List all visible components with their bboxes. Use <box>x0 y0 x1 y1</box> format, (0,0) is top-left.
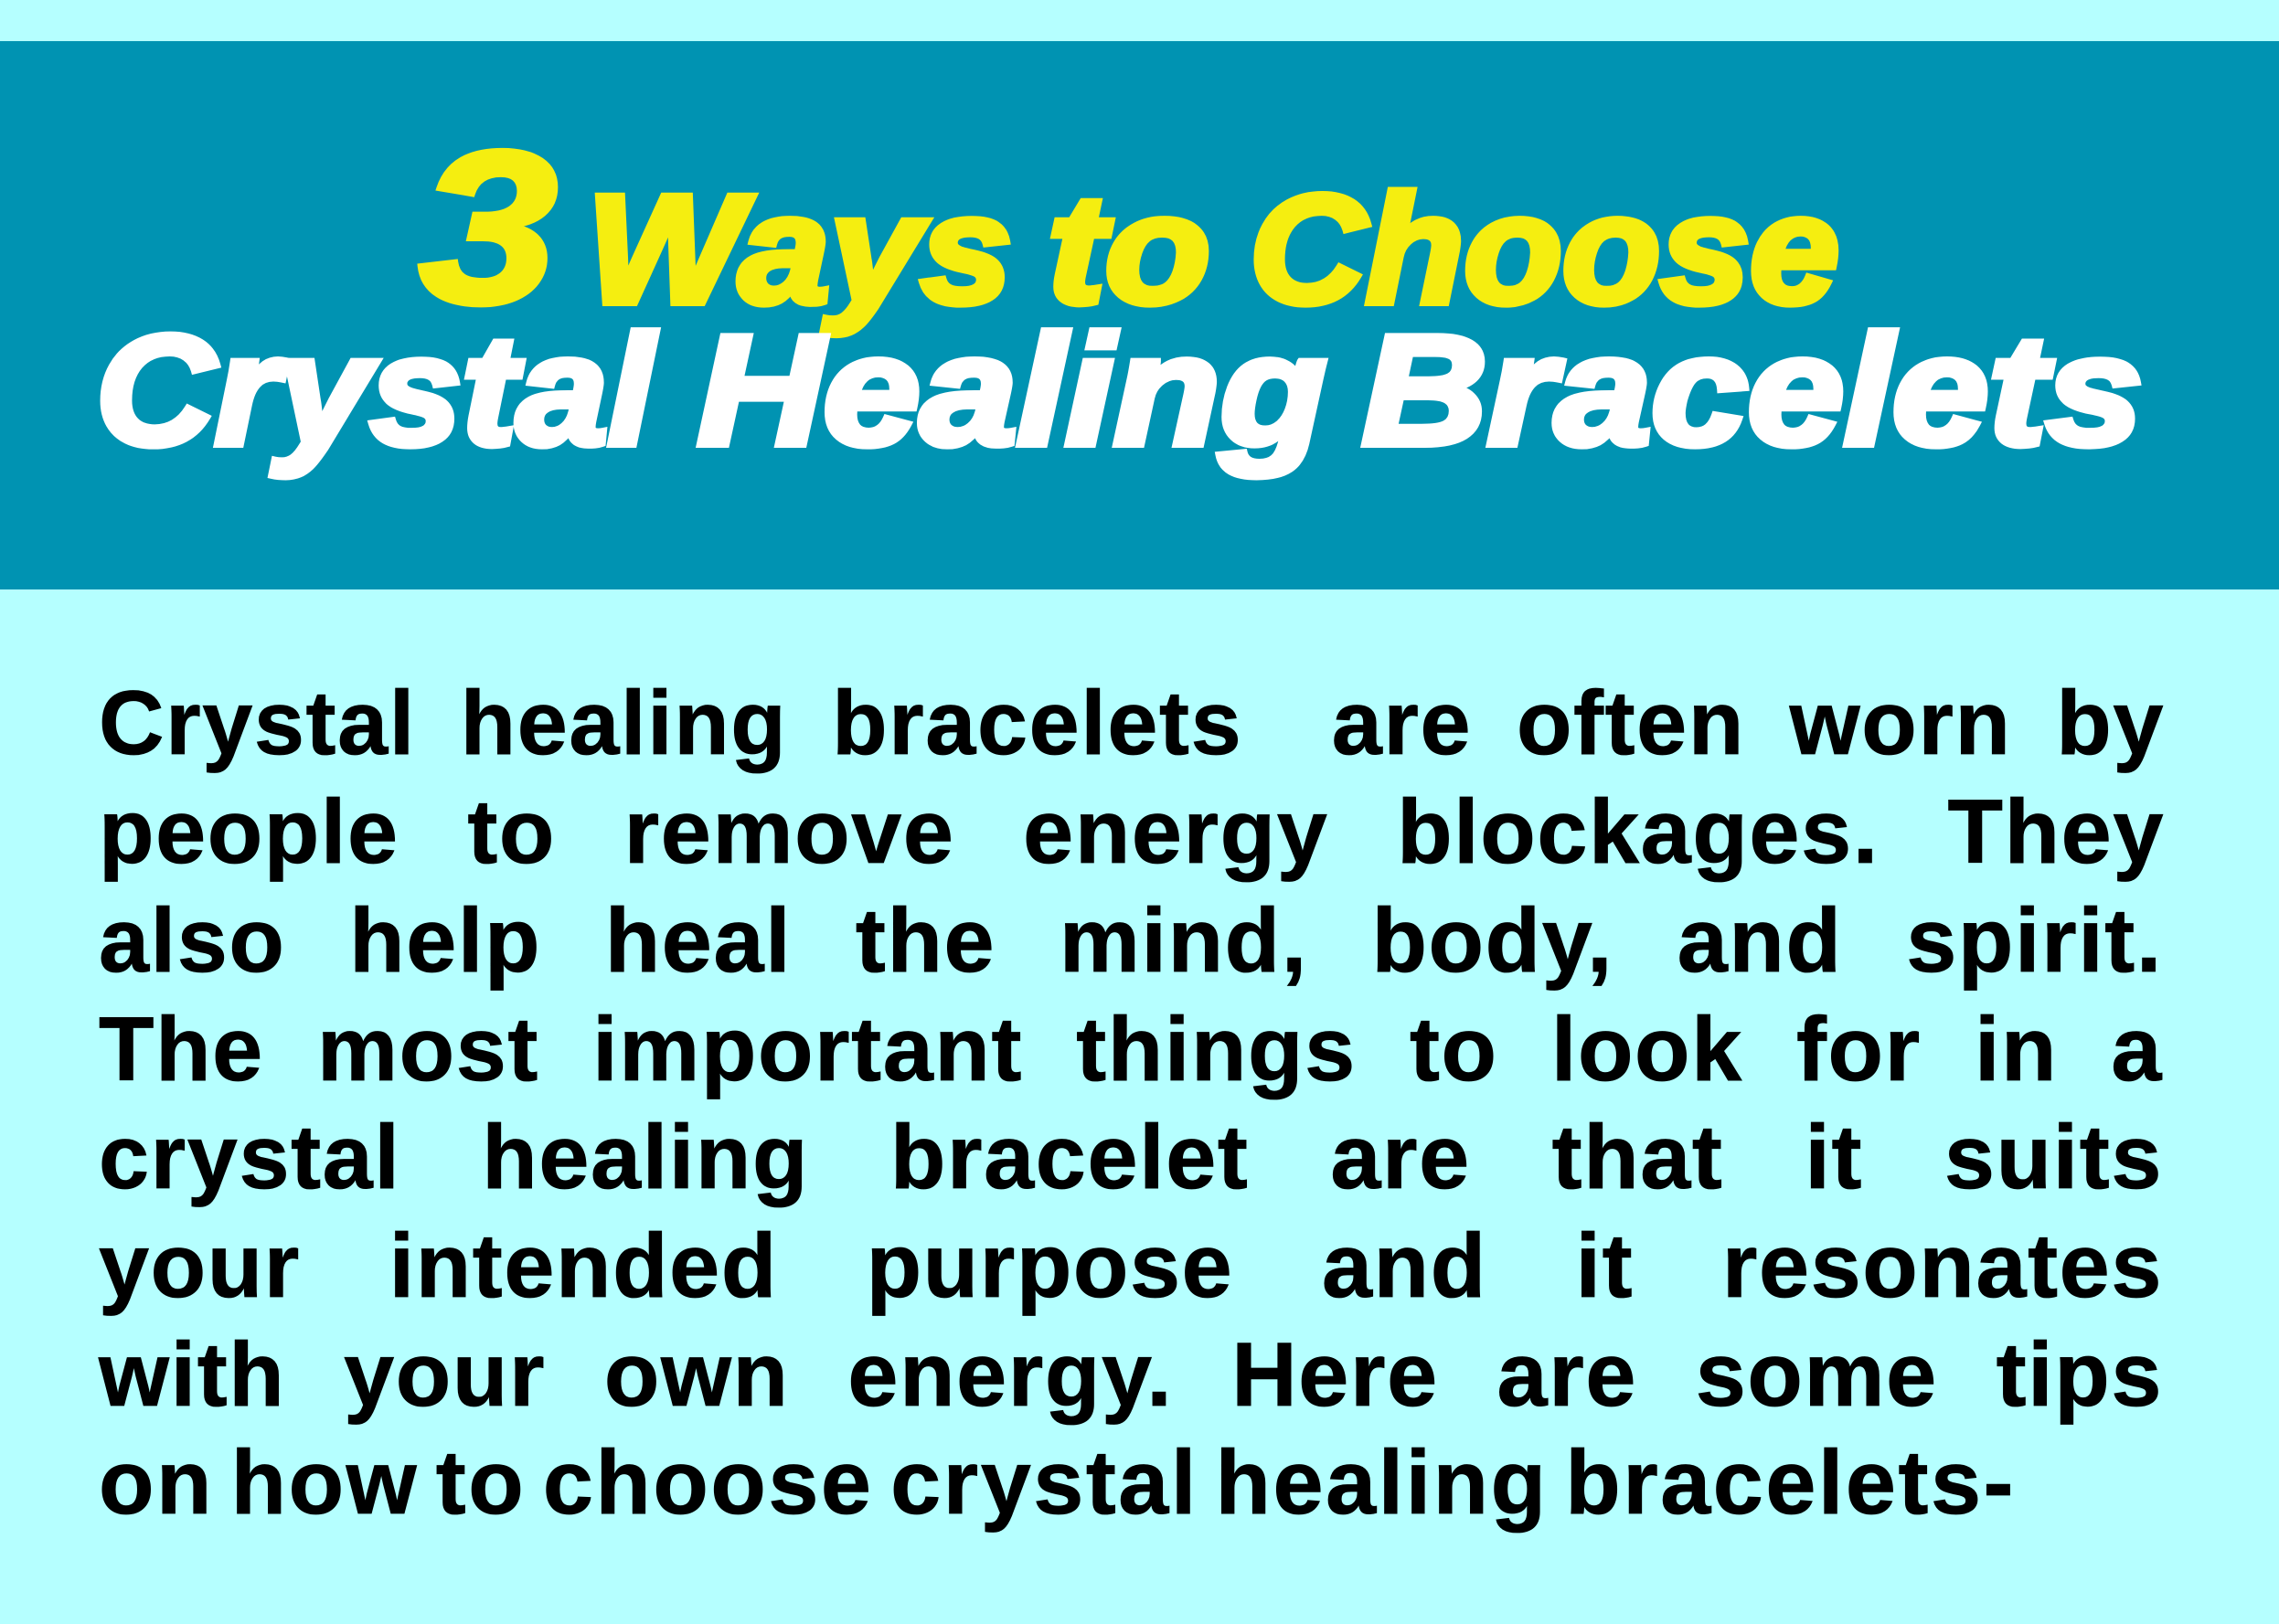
body paragraph: with your own energy. Here are some tips <box>99 1323 2163 1425</box>
body paragraph: people to remove energy blockages. They <box>99 780 2165 882</box>
title line: Ways to Choose: Choose <box>1250 163 1839 335</box>
title line: Ways to Choose <box>587 163 1839 335</box>
title line: Crystal Healing Bracelets: Bracelets <box>1362 303 2143 478</box>
body paragraph: on how to choose crystal healing bracelets- <box>99 1431 2016 1533</box>
title line: Ways to Choose: to <box>1048 163 1210 335</box>
title line: Crystal Healing Bracelets <box>96 303 2143 478</box>
title <box>96 107 2143 481</box>
body paragraph: The most important things to look for in a <box>99 998 2163 1099</box>
body paragraph: also help heal the mind, body, and spirit. <box>99 889 2163 991</box>
body paragraph: your intended purpose and it resonates <box>99 1215 2163 1316</box>
header band <box>0 41 2279 589</box>
title line: Ways to Choose: Ways <box>587 163 1012 335</box>
body paragraph: Crystal healing bracelets are often worn by <box>99 672 2165 773</box>
title numeral: 3: 3 <box>419 107 558 349</box>
title line: Crystal Healing Bracelets: Healing <box>698 303 1326 478</box>
body paragraph <box>98 672 2165 1534</box>
title line: Crystal Healing Bracelets: Crystal <box>96 303 657 478</box>
body paragraph: crystal healing bracelet are that it suits <box>99 1106 2163 1207</box>
